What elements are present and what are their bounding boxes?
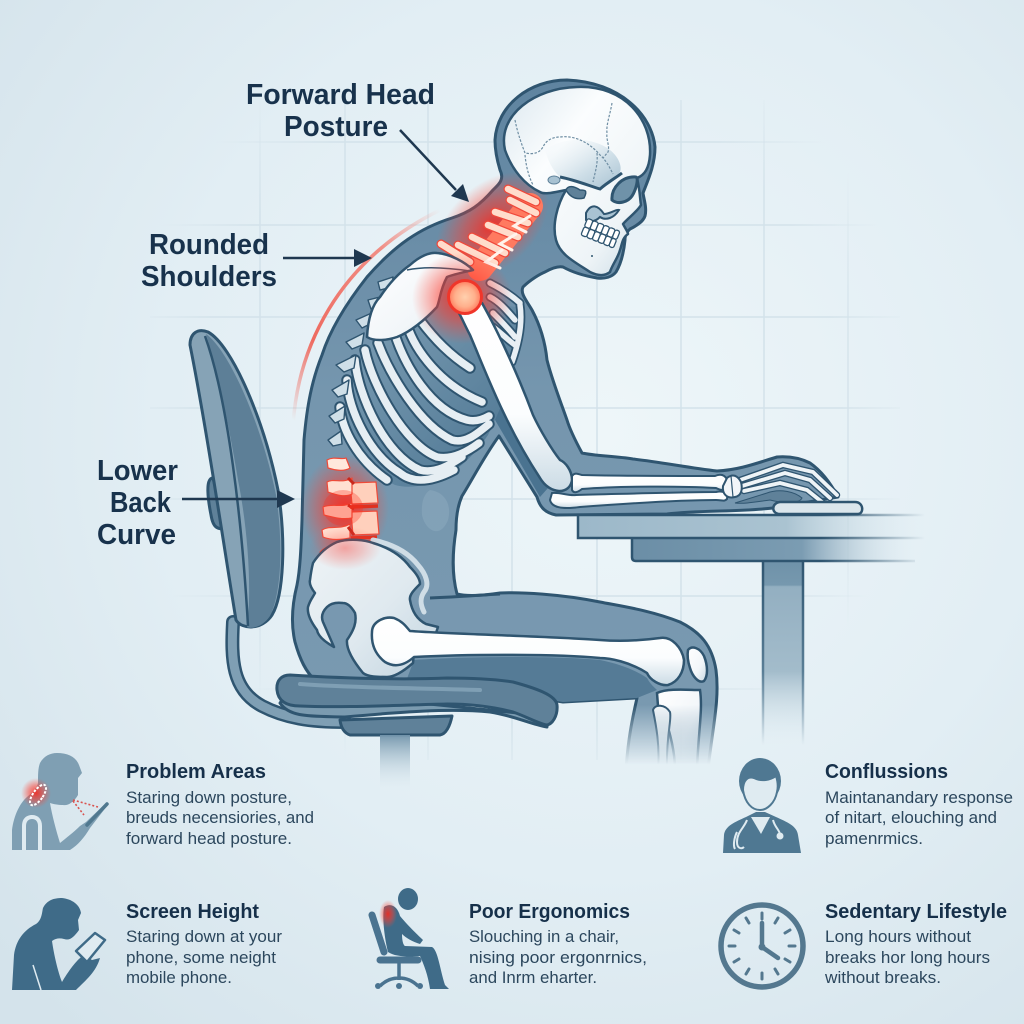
- ear opening: [548, 176, 560, 184]
- icon: clock: [721, 905, 803, 987]
- body text: breaks hor long hours: [825, 949, 990, 967]
- label: rounded shoulders: Rounded: [149, 229, 269, 261]
- skull: [504, 87, 650, 275]
- panel: screen height: [12, 898, 283, 990]
- temporal hollow: [545, 140, 621, 188]
- thoracic spine processes: [328, 277, 393, 446]
- body text: nising poor ergonrnics,: [469, 949, 647, 967]
- body text: Long hours without: [825, 928, 971, 946]
- body text: of nitart, elouching and: [825, 809, 997, 827]
- seat: [277, 675, 557, 735]
- radius: [550, 491, 727, 508]
- teeth: [581, 218, 620, 248]
- under-thigh shadow: [405, 657, 657, 702]
- ribcage: [340, 283, 522, 487]
- body text: mobile phone.: [126, 969, 232, 987]
- back ribs: [340, 320, 489, 480]
- leg bones: [372, 618, 707, 770]
- fibula: [653, 706, 670, 770]
- lower leg bones with fade: [653, 690, 701, 770]
- body text: [126, 789, 314, 848]
- icon: slouched person on office chair: [372, 888, 449, 989]
- label: forward head posture: Posture: [284, 111, 388, 143]
- body text: breuds necensiories, and: [126, 809, 314, 827]
- panel: poor ergonomics: [372, 888, 647, 989]
- body text: Maintanandary response: [825, 789, 1013, 807]
- lower desk slab: [632, 539, 915, 561]
- lumbar vertebrae: [320, 458, 379, 556]
- desk leg: [763, 561, 803, 745]
- icon: person looking at phone with neck pain: [12, 753, 107, 850]
- body text: [126, 928, 283, 987]
- label: forward head posture: Forward Head: [246, 79, 435, 111]
- seat column: [380, 735, 410, 792]
- label: forward head posture: [246, 79, 435, 143]
- humerus: [450, 300, 572, 491]
- tibia: [657, 690, 701, 770]
- office chair backrest: [190, 331, 345, 722]
- label: lower back curve: Lower: [97, 455, 178, 487]
- cervical spine: [441, 189, 536, 268]
- body text: pamenrmics.: [825, 830, 923, 848]
- lumbar glow core: [323, 490, 363, 526]
- femur: [372, 618, 684, 685]
- label: lower back curve: Curve: [97, 519, 176, 551]
- red glow: lower back: [301, 454, 389, 562]
- arrow: rounded shoulders: [283, 249, 372, 267]
- red glow: neck: [415, 151, 569, 301]
- body text: phone, some neight: [126, 949, 276, 967]
- cranial sutures: [515, 103, 613, 185]
- pelvis: [308, 540, 438, 677]
- heading: Sedentary Lifestyle: [825, 900, 1007, 923]
- body text: without breaks.: [824, 969, 941, 987]
- humeral head: [448, 280, 482, 314]
- body text: [469, 928, 647, 987]
- arm shadow band: [463, 365, 548, 497]
- scapula: [367, 253, 473, 340]
- hand bones: [723, 465, 837, 503]
- keyboard: [773, 502, 862, 514]
- seated body silhouette: [293, 80, 838, 770]
- label: rounded shoulders: [141, 229, 277, 293]
- body text: [825, 789, 1013, 848]
- body text: Staring down posture,: [126, 789, 292, 807]
- body text: Slouching in a chair,: [469, 928, 619, 946]
- ulna: [572, 474, 727, 492]
- upper desk slab: [578, 515, 925, 538]
- label: lower back curve: Back: [110, 487, 172, 519]
- thigh contour line: [430, 594, 500, 598]
- arrow: forward head: [400, 130, 469, 202]
- arrow: lower back: [182, 490, 295, 508]
- arm bones: [448, 280, 727, 508]
- heading: Conflussions: [825, 760, 948, 783]
- body text: [824, 928, 990, 987]
- pelvis red tint: [309, 526, 381, 570]
- panel: sedentary lifestyle: [721, 900, 1007, 987]
- label: rounded shoulders: Shoulders: [141, 261, 277, 293]
- torso shading: [422, 490, 449, 531]
- posture curve arc: [293, 210, 440, 425]
- desk: [578, 502, 925, 745]
- red glow: shoulder: [412, 252, 512, 344]
- icon: person staring at phone: [12, 898, 105, 990]
- icon: doctor with stethoscope: [723, 758, 801, 853]
- panel: conflussions: [723, 758, 1013, 853]
- patella: [688, 648, 707, 682]
- body text: Staring down at your: [126, 928, 283, 946]
- upper front ribs: [490, 283, 521, 362]
- panel: problem areas: [12, 753, 314, 850]
- label: lower back curve: [97, 455, 178, 551]
- body text: forward head posture.: [126, 830, 292, 848]
- heading: Screen Height: [126, 900, 259, 923]
- heading: Problem Areas: [126, 760, 266, 783]
- cheek and jaw hollow: [566, 187, 586, 199]
- heading: Poor Ergonomics: [469, 900, 630, 923]
- eye orbit: [612, 177, 637, 203]
- body text: and Inrm eharter.: [469, 969, 597, 987]
